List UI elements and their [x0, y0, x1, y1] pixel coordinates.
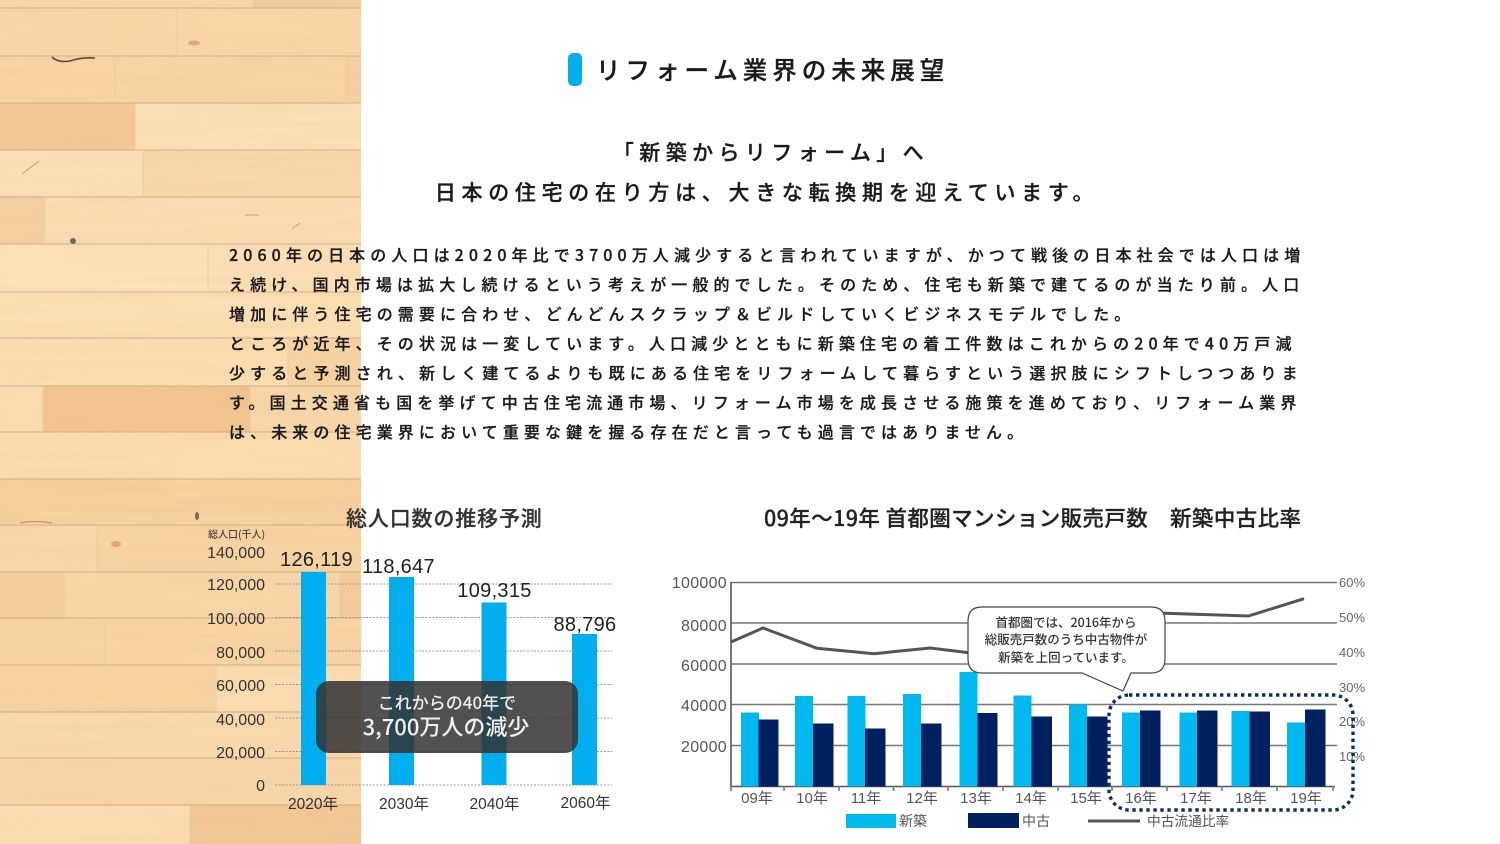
left axis labels	[672, 575, 727, 756]
y axis labels: 60,000	[216, 678, 265, 695]
y axis labels: 100,000	[207, 611, 265, 628]
speech bubble callout: 首都圏では、2016年から	[995, 612, 1137, 631]
dotted highlight around 2016-2019	[1109, 695, 1353, 810]
new-build bars	[741, 672, 1305, 786]
x axis labels: 2060年	[561, 794, 610, 812]
x axis year labels: 14年	[1015, 790, 1047, 807]
y axis labels: 0	[256, 778, 265, 795]
x axis year labels: 11年	[851, 790, 881, 807]
callout: 37 million decline: 3,700万人の減少	[363, 710, 529, 742]
left axis labels: 40000	[681, 698, 727, 715]
left axis labels: 80000	[681, 618, 727, 635]
y axis labels: 総人口(千人)	[208, 526, 265, 541]
speech bubble callout: 新築を上回っています。	[998, 647, 1134, 666]
speech bubble callout: 総販売戸数のうち中古物件が	[985, 629, 1148, 648]
title marker: blue pill	[568, 53, 582, 86]
body paragraph: 増加に伴う住宅の需要に合わせ、どんどんスクラップ＆ビルドしていくビジネスモデルでした。	[229, 301, 1135, 325]
population chart heading: 総人口数の推移予測	[346, 503, 543, 533]
wood floor background panel	[0, 0, 361, 844]
x axis year labels: 15年	[1070, 790, 1102, 807]
used-home bars	[758, 710, 1326, 786]
x axis labels	[288, 794, 610, 813]
body paragraph	[229, 242, 1305, 443]
combo chart: mansion sales new vs used	[672, 575, 1365, 831]
y axis labels: 40,000	[216, 712, 265, 729]
right axis labels: 10%	[1339, 749, 1365, 764]
subheading: 「新築からリフォーム」へ	[613, 137, 929, 167]
body paragraph: す。国土交通省も国を挙げて中古住宅流通市場、リフォーム市場を成長させる施策を進めており、リフォーム業界	[229, 390, 1301, 414]
x axis labels: 2030年	[379, 795, 429, 813]
right axis labels	[1339, 575, 1365, 764]
bar chart: total population forecast	[207, 526, 616, 813]
subheading: 日本の住宅の在り方は、大きな転換期を迎えています。	[435, 177, 1099, 207]
x axis year labels: 16年	[1125, 790, 1157, 807]
speech bubble callout	[968, 607, 1165, 691]
y axis labels: 20,000	[216, 745, 265, 762]
x axis labels: 2020年	[288, 795, 338, 813]
legend: 中古	[1022, 811, 1050, 831]
x axis year labels	[741, 790, 1322, 807]
right axis labels: 30%	[1339, 680, 1365, 695]
population bars	[301, 572, 597, 785]
population values: 109,315	[457, 580, 532, 602]
x axis year labels: 17年	[1180, 790, 1212, 807]
left axis labels: 20000	[681, 739, 727, 756]
left axis labels: 60000	[681, 658, 727, 675]
population values: 88,796	[554, 614, 616, 636]
callout: 37 million decline	[316, 681, 578, 753]
x axis labels: 2040年	[470, 795, 519, 813]
mansion chart heading: 09年～19年 首都圏マンション販売戸数 新築中古比率	[764, 502, 1301, 533]
body paragraph: は、未来の住宅業界において重要な鍵を握る存在だと言っても過言ではありません。	[229, 419, 1028, 443]
population values: 126,119	[280, 549, 353, 571]
y axis labels: 140,000	[207, 545, 265, 562]
population values: 118,647	[362, 556, 435, 578]
legend: 新築	[899, 811, 927, 831]
x axis year labels: 12年	[906, 790, 938, 807]
right axis labels: 20%	[1339, 714, 1365, 729]
right axis labels: 60%	[1339, 575, 1365, 590]
body paragraph: ところが近年、その状況は一変しています。人口減少とともに新築住宅の着工件数はこれからの20年で40万戸減	[229, 330, 1297, 354]
callout: 37 million decline: これからの40年で	[378, 689, 516, 714]
right axis labels: 50%	[1339, 610, 1365, 625]
body paragraph: 2060年の日本の人口は2020年比で3700万人減少すると言われていますが、かつて戦後の日本社会では人口は増	[229, 242, 1305, 266]
x axis year labels: 19年	[1290, 790, 1322, 807]
x axis year labels: 13年	[960, 790, 992, 807]
subheading	[435, 137, 1099, 207]
x axis year labels: 18年	[1235, 790, 1267, 807]
x axis year labels: 10年	[796, 790, 828, 807]
y axis labels: 80,000	[216, 645, 265, 662]
y axis labels	[207, 526, 265, 795]
left axis labels: 100000	[672, 575, 727, 592]
legend: 中古流通比率	[1147, 810, 1229, 830]
body paragraph: え続け、国内市場は拡大し続けるという考えが一般的でした。そのため、住宅も新築で建てるのが当たり前。人口	[229, 272, 1304, 296]
right axis labels: 40%	[1339, 645, 1365, 660]
main title: リフォーム業界の未来展望	[596, 52, 949, 87]
x axis year labels: 09年	[741, 790, 773, 807]
y axis labels: 120,000	[207, 577, 265, 594]
used-home circulation ratio line	[731, 599, 1304, 654]
population values	[280, 549, 616, 636]
body paragraph: 少すると予測され、新しく建てるよりも既にある住宅をリフォームして暮らすという選択肢にシフトしつつありま	[229, 360, 1303, 384]
legend	[846, 810, 1229, 831]
